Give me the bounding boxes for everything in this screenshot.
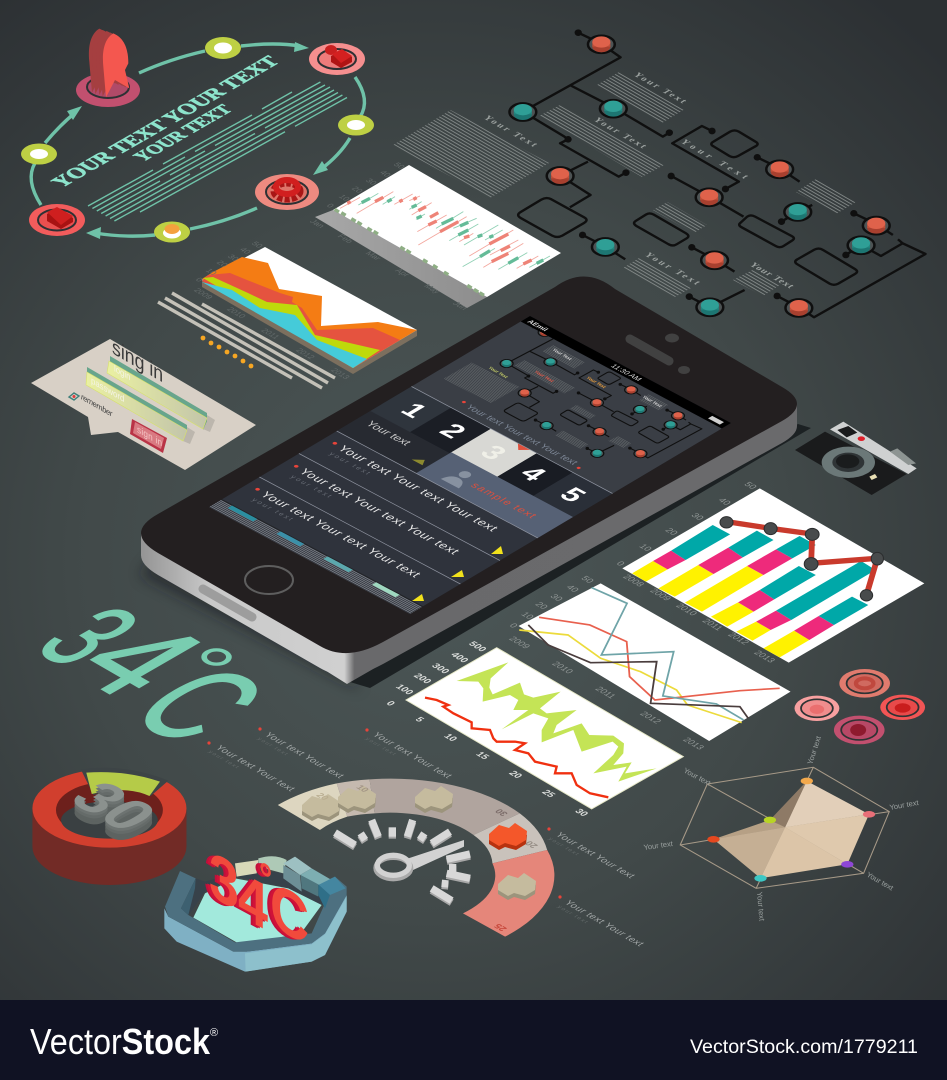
phone screen (209, 316, 731, 614)
red trend pipe (720, 517, 883, 601)
icon: user ring (795, 696, 839, 721)
phone camera dot (665, 334, 679, 342)
annotation 4: Your text Your text (552, 831, 638, 880)
status bar: AEmil (525, 319, 549, 332)
hexagon temperature: ° (259, 853, 272, 904)
flow chart labels: Your Text (590, 116, 649, 150)
donut number: 30 (56, 779, 172, 846)
number tabs: 5 (553, 483, 593, 506)
smartphone (141, 276, 797, 684)
icon: rocket ring (834, 716, 885, 744)
sign-in card (31, 339, 256, 470)
list rows: your text (250, 498, 296, 523)
line chart axis: 2012 (638, 710, 664, 725)
bar chart axis: 2009 (648, 587, 674, 602)
candlestick axis: Mar (363, 250, 383, 262)
radar plot (680, 767, 889, 888)
flow chart labels: Your Text (641, 251, 703, 287)
candlestick axis (308, 161, 470, 311)
screen mini labels (487, 348, 664, 408)
gauge scale numbers: 20 (314, 791, 331, 802)
flow chart labels: Your Text (677, 138, 751, 181)
bar chart axis: 0 (614, 560, 627, 567)
node: gear (255, 174, 319, 210)
cycle arrows (31, 42, 364, 239)
radar chart (643, 734, 920, 922)
area axis: 2009 (192, 287, 215, 301)
radar labels (643, 734, 920, 922)
donut number: 30 (56, 776, 172, 843)
bar chart axis: 2008 (621, 573, 647, 588)
gauge arc segments (278, 779, 554, 937)
number tabs: 1 (394, 399, 434, 422)
list rows: Your text Your text Your text (257, 490, 424, 579)
list rows: your text (288, 475, 335, 500)
bar chart axis (614, 480, 778, 664)
area axis (192, 240, 352, 381)
big temperature label: 3 (8, 590, 169, 683)
line chart axis: 2013 (681, 736, 707, 751)
sign-in button: sign in (137, 424, 162, 450)
phone edge (141, 298, 797, 684)
spike chart axis: 15 (473, 750, 492, 761)
bar chart axis: 2012 (726, 631, 752, 646)
radar labels: Your text (805, 734, 823, 766)
annotation 4: your text (546, 837, 581, 857)
footer band (0, 1000, 947, 1080)
spike chart axis: 200 (411, 672, 434, 685)
row arrows (412, 546, 503, 601)
phone speaker (630, 339, 669, 361)
area axis: 2013 (329, 367, 352, 381)
flow chart diagram (509, 29, 925, 317)
radar labels: Your text (643, 839, 674, 852)
bar chart (614, 480, 924, 664)
icon: gear ring (839, 669, 890, 698)
area axis: 2012 (294, 347, 317, 361)
spike chart axis (383, 640, 591, 818)
area axis: 10 (203, 267, 219, 276)
line chart (507, 574, 791, 751)
spike chart axis: 25 (539, 788, 558, 799)
number tabs: 3 (474, 441, 514, 464)
bar chart axis: 2010 (674, 602, 700, 617)
candlesticks (335, 192, 550, 295)
screen mini labels: Your Text (641, 395, 664, 408)
hexagon temperature: C (265, 867, 304, 961)
gauge ticks and wrench needle (335, 820, 470, 903)
annotation 1: your text (206, 750, 241, 770)
bar chart axis: 2011 (700, 617, 725, 632)
donut body (32, 768, 186, 885)
login field: login (114, 363, 130, 382)
node: right dot (338, 114, 374, 136)
screen mini labels: Your Text (487, 366, 510, 379)
icon: heart ring (880, 695, 925, 720)
big temperature label: 4 (41, 602, 239, 717)
gauge car icons (302, 786, 536, 900)
screen mini labels: Your Text (585, 376, 608, 389)
node: left dot (21, 144, 57, 164)
flow chart labels (480, 71, 796, 290)
password field: password (91, 375, 124, 404)
spike chart axis: 10 (441, 732, 460, 743)
bar chart axis: 40 (716, 496, 733, 507)
annotation 2: Your text Your text (261, 731, 347, 780)
area axis: 40 (237, 246, 253, 255)
map panel background (412, 322, 722, 493)
spike chart axis: 0 (383, 700, 397, 708)
hexagon temperature: C (270, 867, 309, 961)
candlestick axis: Feb (335, 233, 356, 245)
spike chart axis: 5 (412, 716, 427, 724)
area axis: 30 (225, 253, 241, 262)
area chart legend bars (158, 293, 335, 388)
phone shadow (140, 424, 811, 690)
bar chart axis: 10 (637, 542, 654, 553)
donut number: 30 (56, 782, 172, 849)
candlestick axis: 30 (363, 177, 379, 186)
area axis: 20 (214, 259, 230, 268)
candlestick axis: Jun (451, 300, 470, 311)
node: button dot (154, 222, 190, 242)
line chart plot (519, 583, 791, 741)
list rows (222, 386, 613, 606)
gauge scale numbers: 20 (523, 839, 540, 850)
hexagon gauge (164, 837, 347, 972)
phone face (141, 276, 797, 653)
candlestick axis: 40 (377, 169, 393, 178)
area axis: 2011 (259, 327, 282, 341)
line chart axis: 20 (533, 600, 550, 611)
hexagon temperature: 3 (206, 837, 236, 926)
candlestick axis: 10 (336, 193, 352, 202)
line chart axis: 0 (507, 622, 520, 629)
spike chart axis: 100 (393, 683, 416, 696)
radar labels: Your text (755, 891, 767, 922)
remember checkbox: remember (81, 391, 113, 420)
area chart dots (201, 336, 253, 368)
hexagon temperature: 4 (238, 857, 268, 946)
radar labels: Your text (865, 870, 896, 893)
candlestick axis: Jan (308, 218, 327, 229)
status bar (521, 316, 731, 428)
screen mini flow chart (444, 325, 702, 458)
gauge scale numbers: 10 (354, 783, 371, 794)
hexagon temperature: ° (256, 853, 269, 904)
annotation 5: Your text Your text (561, 899, 647, 948)
bottom tabs (209, 500, 423, 614)
line chart axis: 2011 (593, 685, 618, 700)
sample text panel (416, 452, 573, 538)
footer logo: VectorStock (30, 1021, 211, 1062)
footer url: VectorStock.com/1779211 (690, 1037, 918, 1058)
left tab (337, 411, 450, 473)
node: top dot (205, 37, 241, 59)
sign-in title: sing in (112, 335, 163, 388)
area layers (202, 257, 417, 368)
line chart axis: 40 (564, 583, 581, 594)
line chart axis: 30 (548, 592, 565, 603)
password field (86, 367, 195, 444)
sign-in panel (31, 335, 256, 470)
home button (245, 566, 293, 594)
sample text panel: sample text (467, 481, 539, 520)
footer registered mark: ® (210, 1027, 218, 1039)
flow chart labels: Your Text (746, 261, 796, 290)
list rows: Your text Your text Your text (296, 467, 463, 556)
bar chart axis: 2013 (752, 649, 778, 664)
donut gauge (32, 768, 186, 885)
hexagon temperature: ° (254, 853, 267, 904)
flow chart labels: Your Text (480, 114, 540, 149)
annotation 1: Your text Your text (212, 744, 298, 793)
candlestick plate (315, 210, 487, 308)
line chart axis (507, 574, 707, 751)
annotation 2: your text (255, 737, 290, 757)
cycle heading: YOUR TEXT (129, 102, 238, 165)
line chart axis: 50 (579, 574, 596, 585)
spike chart axis: 400 (448, 651, 471, 664)
screen mini labels: Your Text (551, 348, 574, 361)
hexagon body (164, 856, 347, 972)
annotation 5: your text (555, 905, 590, 925)
login field (107, 356, 215, 432)
gauge scale numbers: 25 (492, 922, 509, 933)
flow chart text blocks (393, 72, 856, 297)
number tabs: 2 (433, 419, 473, 442)
flow chart (393, 29, 925, 317)
big temperature label (8, 590, 299, 763)
donut number: 30 (56, 773, 172, 840)
node: user (309, 43, 365, 75)
area axis: 2010 (225, 306, 248, 320)
spike chart axis: 300 (429, 662, 452, 675)
flow chart labels: Your Text (630, 71, 689, 105)
node: heart (29, 204, 85, 236)
bar chart axis: 20 (663, 526, 680, 537)
hexagon temperature (204, 837, 309, 961)
candlestick axis: Apr (393, 267, 412, 278)
sign-in button (130, 419, 167, 453)
hexagon temperature: 3 (204, 837, 234, 926)
small ring icons (795, 669, 925, 744)
hexagon temperature: 4 (235, 857, 265, 946)
candlestick axis: 20 (349, 185, 365, 194)
candlestick axis: May (422, 283, 443, 295)
hexagon temperature: 4 (233, 857, 263, 946)
hexagon temperature: C (267, 867, 306, 961)
cycle heading: YOUR TEXT YOUR TEXT (46, 52, 285, 191)
area axis: 50 (249, 240, 265, 249)
candlestick axis: 50 (391, 161, 407, 170)
line chart axis: 10 (519, 610, 536, 621)
candlestick chart (308, 161, 561, 311)
area chart base (202, 281, 417, 374)
donut number: 30 (56, 785, 172, 852)
cycle body lines (88, 82, 347, 221)
spike chart axis: 30 (572, 807, 591, 818)
phone sensor dot (678, 366, 690, 374)
list rows: Your text Your text Your text (334, 444, 502, 533)
spike chart axis: 500 (466, 640, 489, 653)
number tabs (370, 386, 613, 518)
bar chart plot (622, 488, 924, 663)
gauge scale numbers: 30 (493, 807, 510, 818)
hexagon temperature: 3 (209, 837, 239, 926)
map caption: Your text Your text Your text (463, 403, 580, 467)
annotation 3: Your text Your text (369, 731, 455, 780)
number tabs: 4 (513, 462, 554, 485)
gauge scale numbers (314, 783, 540, 933)
annotation 3: your text (363, 737, 398, 757)
big temperature label: C (98, 647, 299, 763)
left tab: Your text (363, 420, 414, 448)
remember checkbox (69, 391, 113, 420)
screen mini labels: Your Text (533, 370, 556, 383)
big temperature label: ° (142, 633, 259, 700)
status bar: 11:30 AM (609, 363, 644, 382)
speed gauge (278, 779, 554, 937)
line chart axis: 2010 (550, 660, 576, 675)
phone side button (203, 589, 252, 617)
radar labels: Your text (682, 766, 713, 788)
bar chart axis: 50 (742, 480, 759, 491)
candlestick axis: 0 (324, 202, 336, 209)
list rows: your text (327, 452, 373, 477)
node: rocket (76, 29, 140, 107)
spike chart plot (406, 648, 683, 809)
cycle diagram (21, 29, 374, 242)
bar chart axis: 30 (689, 511, 706, 522)
spike chart axis: 20 (506, 769, 525, 780)
line chart axis: 2009 (507, 635, 533, 650)
camera icon (795, 422, 917, 495)
spike chart (383, 640, 683, 818)
radar labels: Your text (889, 798, 920, 812)
area chart (158, 240, 417, 388)
area axis: 0 (193, 276, 205, 283)
